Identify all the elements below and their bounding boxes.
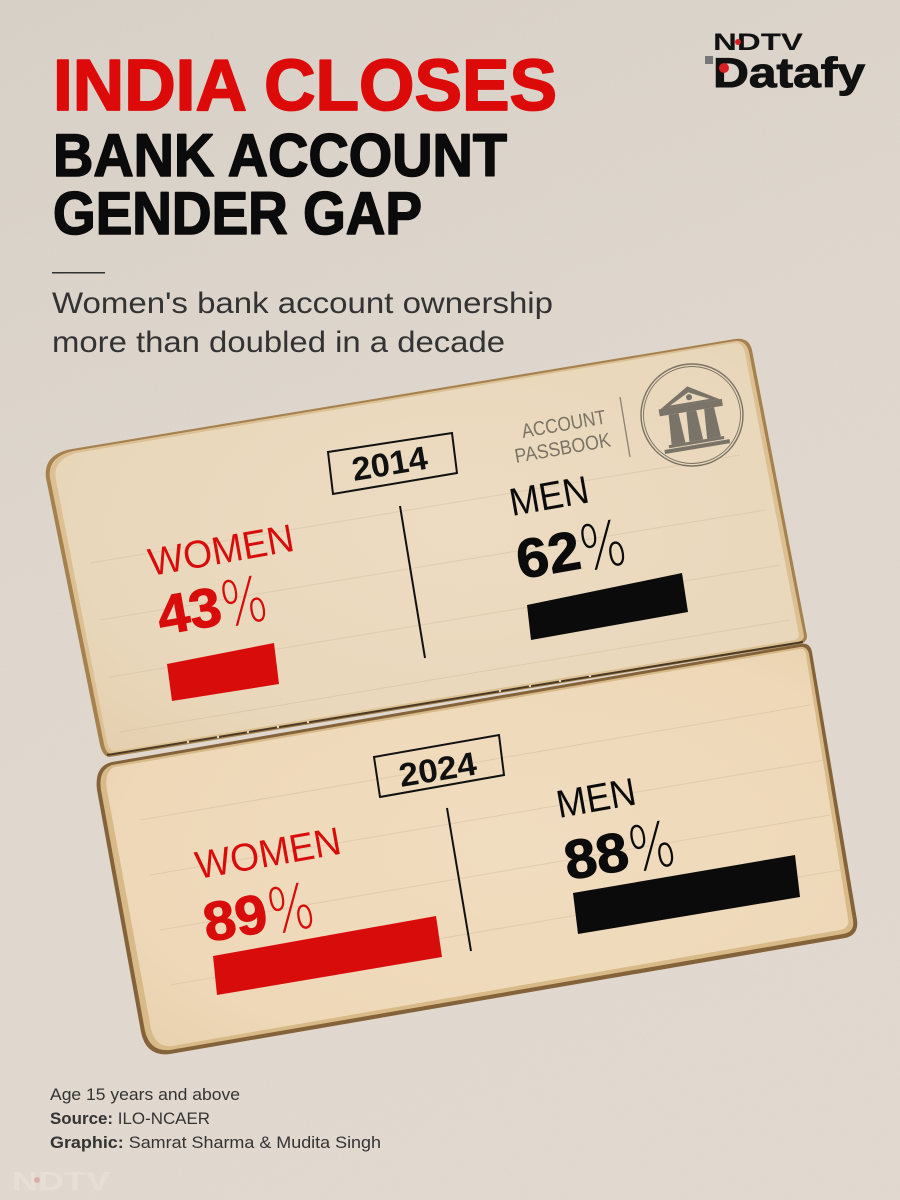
2024 women xyxy=(192,820,442,995)
2014 women: % xyxy=(215,562,273,642)
2024 divider xyxy=(447,808,471,951)
2014 women: WOMEN xyxy=(145,517,297,585)
2024 year box: 2024 xyxy=(396,744,480,794)
2014 men: % xyxy=(574,506,632,586)
title: BANK ACCOUNT xyxy=(53,122,507,189)
2014 men xyxy=(506,469,688,640)
title: INDIA CLOSES xyxy=(53,46,557,126)
account passbook label: PASSBOOK xyxy=(513,429,613,468)
page: 2014 xyxy=(46,339,807,757)
2014 men: MEN xyxy=(506,469,592,525)
passbook xyxy=(46,339,857,1054)
subtitle: more than doubled in a decade xyxy=(52,326,505,359)
title: GENDER GAP xyxy=(53,180,422,247)
logo: NDTV Datafy xyxy=(705,29,866,96)
2014 women: 43 xyxy=(152,575,226,647)
2014 year box xyxy=(328,433,457,494)
account passbook label xyxy=(513,397,630,468)
subtitle xyxy=(52,287,553,359)
2014 year box: 2014 xyxy=(349,439,431,488)
2024 women: 89 xyxy=(198,882,272,954)
2024 men xyxy=(553,771,800,934)
2024 men: 88 xyxy=(559,820,633,892)
2014 divider xyxy=(400,506,425,658)
icon: bank emblem xyxy=(641,364,743,466)
faint ruled lines xyxy=(90,455,840,985)
footer notes: Graphic: Samrat Sharma & Mudita Singh xyxy=(50,1133,381,1152)
footer notes: Age 15 years and above xyxy=(50,1085,240,1104)
stitching xyxy=(107,642,803,755)
2024 women: WOMEN xyxy=(192,820,344,888)
logo: NDTV Datafy: Datafy xyxy=(713,49,866,96)
subtitle: Women's bank account ownership xyxy=(52,287,553,320)
2024 year box xyxy=(374,735,504,797)
2024 women: % xyxy=(262,869,320,949)
title xyxy=(53,46,557,247)
logo: NDTV Datafy: NDTV xyxy=(713,29,803,56)
footer notes xyxy=(50,1085,381,1152)
page: 2024 xyxy=(97,644,857,1054)
2024 men: % xyxy=(623,807,681,887)
2014 men: 62 xyxy=(511,519,585,591)
footer notes: Source: ILO-NCAER xyxy=(50,1109,210,1128)
2024 men: MEN xyxy=(553,771,639,827)
divider rule xyxy=(52,272,105,274)
watermark: NDTV: NDTV xyxy=(12,1166,111,1196)
2014 women xyxy=(145,517,297,701)
account passbook label: ACCOUNT xyxy=(520,406,608,443)
